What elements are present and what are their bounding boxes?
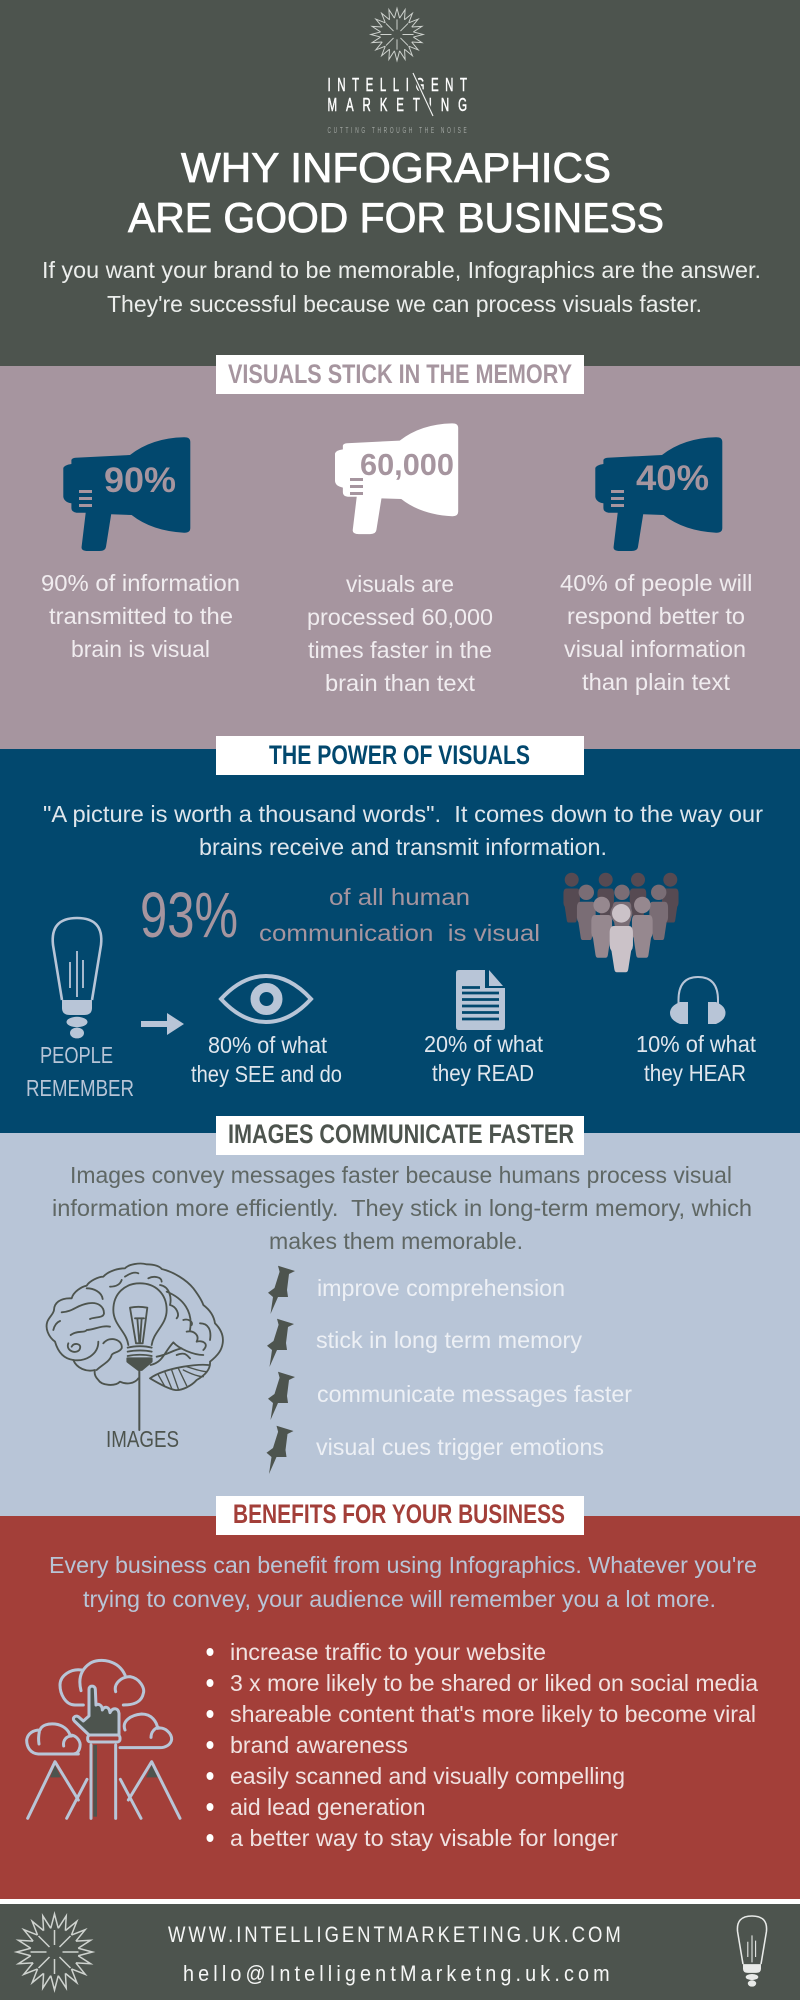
icon: headphones <box>670 977 726 1024</box>
list item: communicate messages faster: communicate messages faster <box>317 1381 632 1407</box>
icon: megaphone 60,000: 60,000 <box>360 447 454 482</box>
quote text <box>43 801 763 860</box>
icon: pushpin 2 <box>267 1319 294 1367</box>
intro text: They're successful because we can process visuals faster. <box>107 291 702 317</box>
heading tab <box>216 1496 584 1535</box>
icon: megaphone 90%: 90% <box>104 461 176 500</box>
paragraph: Every business can benefit from using Infographics. Whatever you're <box>49 1552 757 1578</box>
bullet list <box>206 1639 758 1851</box>
title: WHY INFOGRAPHICS <box>181 144 611 191</box>
intro text: If you want your brand to be memorable, Infographics are the answer. <box>42 257 761 283</box>
text: of all human communication is visual <box>259 884 540 946</box>
paragraph <box>49 1552 757 1612</box>
text: 40% stat <box>560 570 752 695</box>
panel: visuals stick in the memory <box>0 355 800 749</box>
logo: wordmark: MARKETING <box>328 95 467 116</box>
icon: megaphone 60,000 <box>335 423 458 534</box>
stat: 93%: 93% <box>140 879 238 951</box>
title: ARE GOOD FOR BUSINESS <box>128 194 664 241</box>
panel: images communicate faster <box>0 1116 800 1516</box>
text: 80% see: they SEE and do <box>191 1061 342 1087</box>
bullet list: 3 x more likely to be shared or liked on social media <box>230 1670 758 1696</box>
text: 80% see <box>191 1032 342 1087</box>
email address: hello@IntelligentMarketng.uk.com <box>183 1962 610 1986</box>
paragraph: Images convey messages faster because humans process visual <box>70 1162 732 1188</box>
text: 40% stat: respond better to <box>567 603 745 629</box>
bullet list: a better way to stay visable for longer <box>230 1825 618 1851</box>
text: of all human communication is visual: of all human <box>329 884 470 910</box>
icon: document <box>456 970 505 1030</box>
arrow <box>141 1013 184 1035</box>
icon: megaphone 90% <box>63 437 190 551</box>
text: 90% stat: transmitted to the <box>49 603 233 629</box>
heading tab: VISUALS STICK IN THE MEMORY <box>228 359 572 389</box>
paragraph: makes them memorable. <box>269 1228 523 1254</box>
text: 90% stat: brain is visual <box>71 636 210 662</box>
panel: benefits for your business <box>0 1496 800 1899</box>
text: 10% hear <box>636 1031 757 1086</box>
quote text: brains receive and transmit information. <box>199 834 607 860</box>
heading tab <box>216 355 584 394</box>
text: 20% read <box>424 1031 544 1086</box>
bullet list: shareable content that's more likely to become viral <box>230 1701 756 1727</box>
bullet list: easily scanned and visually compelling <box>230 1763 625 1789</box>
icon: megaphone 40% <box>595 437 722 551</box>
text: 20% read: they READ <box>432 1060 534 1086</box>
text: 60,000 stat: processed 60,000 <box>307 604 493 630</box>
text: 10% hear: they HEAR <box>644 1060 746 1086</box>
icon: light bulb <box>737 1916 767 1987</box>
heading tab: BENEFITS FOR YOUR BUSINESS <box>233 1499 565 1529</box>
text: of all human communication is visual: communication is visual <box>259 920 540 946</box>
quote text: "A picture is worth a thousand words". It comes down to the way our <box>43 801 763 827</box>
icon: pushpin 1 <box>268 1266 295 1314</box>
title <box>128 144 664 241</box>
list item: improve comprehension: improve comprehension <box>317 1275 565 1301</box>
bullet list: increase traffic to your website <box>230 1639 546 1665</box>
icon: light bulb <box>53 918 101 1038</box>
logo: wordmark: INTELLIGENT <box>328 75 467 96</box>
paragraph: information more efficiently. They stick in long-term memory, which <box>52 1195 752 1221</box>
text: 40% stat: than plain text <box>582 669 731 695</box>
website address: WWW.INTELLIGENTMARKETING.UK.COM <box>168 1924 621 1947</box>
icon: group of people <box>563 873 679 972</box>
heading tab: IMAGES COMMUNICATE FASTER <box>228 1119 574 1149</box>
intro text <box>42 257 761 317</box>
icon: hand, clouds and mountains <box>27 1660 180 1818</box>
text: 60,000 stat: visuals are <box>346 571 454 597</box>
list item: stick in long term memory: stick in long term memory <box>316 1327 582 1353</box>
icon: megaphone 40%: 40% <box>636 459 709 498</box>
paragraph: trying to convey, your audience will remember you a lot more. <box>83 1586 716 1612</box>
heading tab: THE POWER OF VISUALS <box>269 740 530 770</box>
icon: brain with light bulb <box>47 1264 223 1430</box>
logo: star emblem <box>371 8 423 61</box>
text: 40% stat: 40% of people will <box>560 570 752 596</box>
paragraph <box>52 1162 752 1254</box>
bullet list: aid lead generation <box>230 1794 426 1820</box>
logo: wordmark: CUTTING THROUGH THE NOISE <box>328 127 467 135</box>
list item: visual cues trigger emotions: visual cues trigger emotions <box>316 1434 604 1460</box>
text: 60,000 stat: times faster in the <box>308 637 492 663</box>
panel: the power of visuals <box>0 736 800 1133</box>
logo: star emblem <box>16 1914 93 1990</box>
text: 80% see: 80% of what <box>208 1032 328 1058</box>
panel: header <box>0 0 800 366</box>
heading tab <box>216 736 584 775</box>
text: 20% read: 20% of what <box>424 1031 544 1057</box>
text: 10% hear: 10% of what <box>636 1031 757 1057</box>
icon: eye <box>221 976 311 1022</box>
icon: pushpin 4 <box>266 1426 294 1474</box>
label: people remember: REMEMBER <box>26 1075 134 1101</box>
bullet list: brand awareness <box>230 1732 408 1758</box>
text: 40% stat: visual information <box>564 636 746 662</box>
heading tab <box>216 1116 584 1155</box>
text: 90% stat: 90% of information <box>41 570 240 596</box>
label: images: IMAGES <box>106 1426 179 1452</box>
panel: footer <box>0 1899 800 2000</box>
text: 90% stat <box>41 570 240 662</box>
text: 60,000 stat: brain than text <box>325 670 476 696</box>
logo: wordmark <box>328 73 467 135</box>
label: people remember: PEOPLE <box>40 1042 113 1068</box>
label: people remember <box>26 1042 134 1101</box>
icon: pushpin 3 <box>268 1372 295 1420</box>
text: 60,000 stat <box>307 571 493 696</box>
